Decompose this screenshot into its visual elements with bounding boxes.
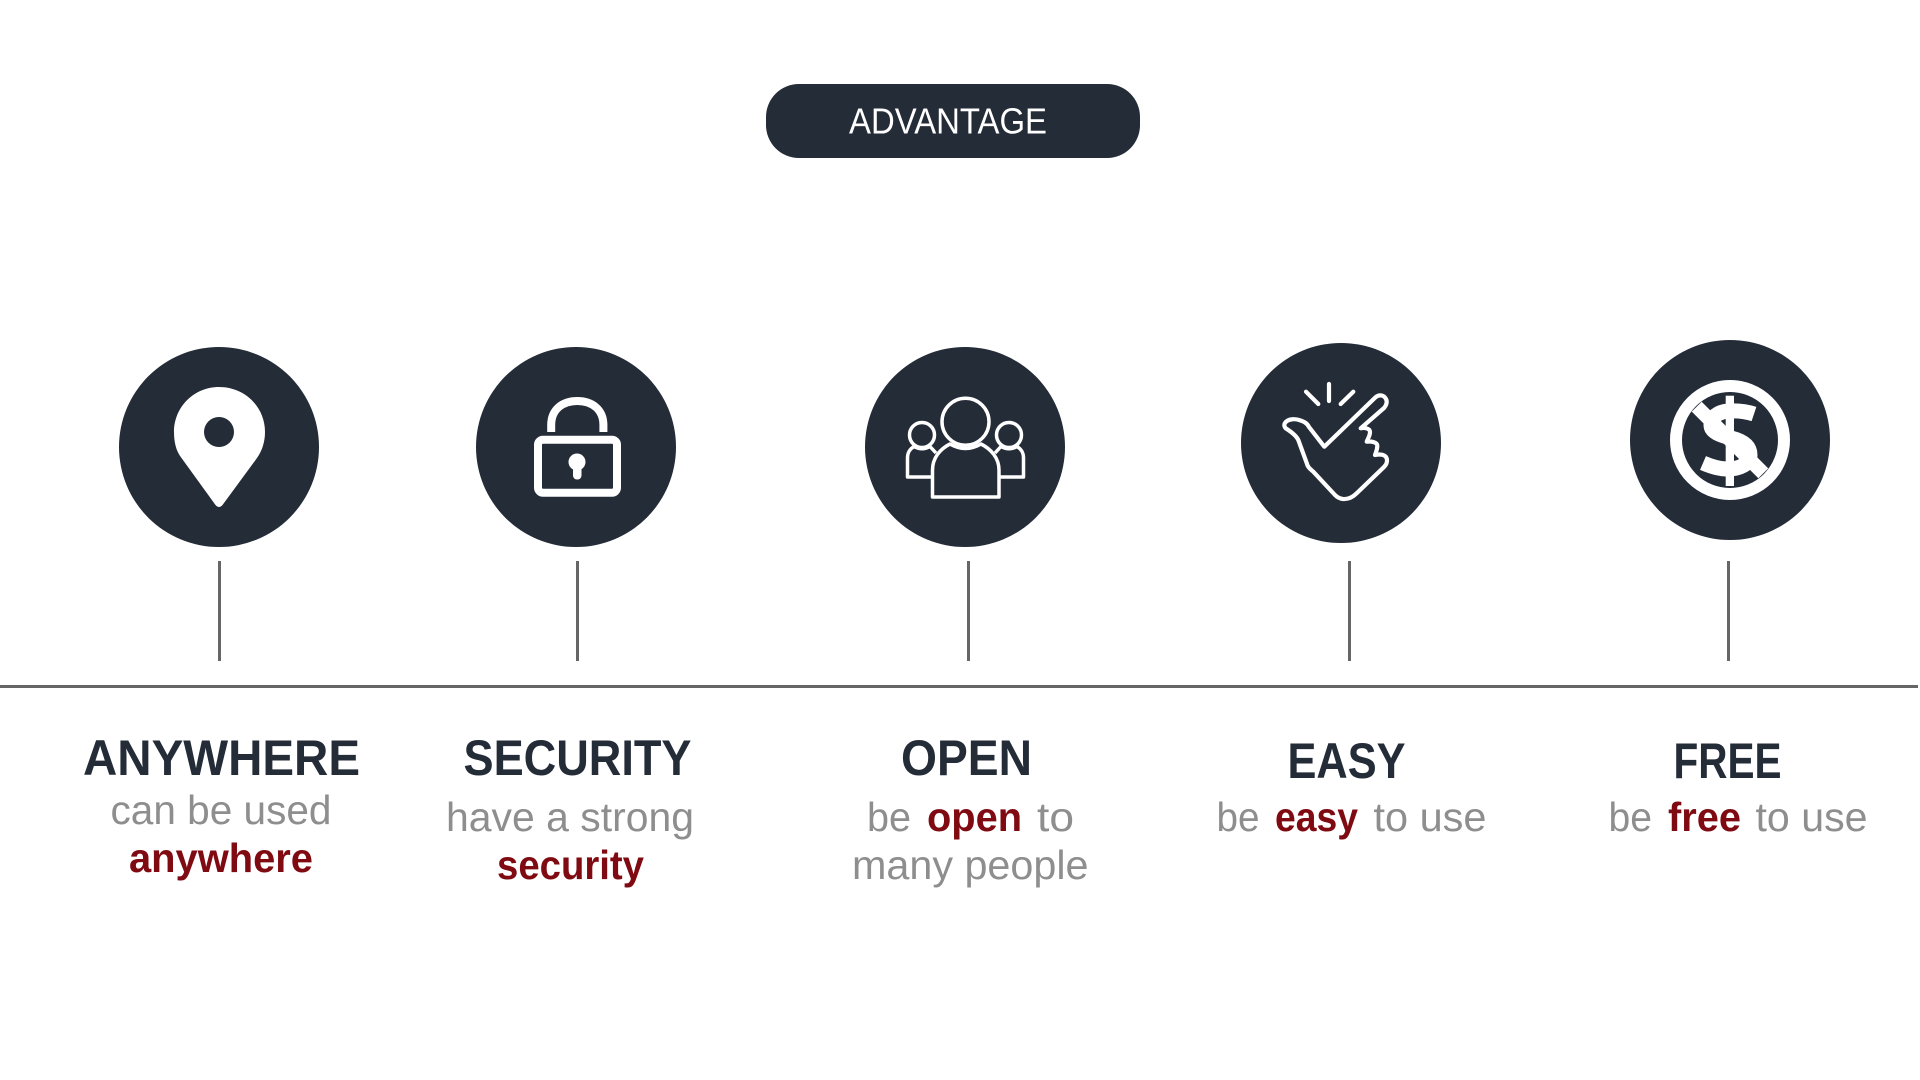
panel: anywhere xyxy=(83,347,360,881)
description: be open to many people: be xyxy=(867,794,911,840)
panel: free xyxy=(1608,340,1868,840)
heading: EASY: EASY xyxy=(1288,733,1406,789)
description: have a strong security xyxy=(446,794,694,888)
description: be open to many people: many people xyxy=(852,842,1088,888)
icon: no dollar sign xyxy=(1630,340,1830,540)
description: have a strong security: security xyxy=(497,842,644,888)
heading: FREE: FREE xyxy=(1674,733,1782,789)
description: be free to use: to use xyxy=(1756,794,1868,840)
description: be easy to use xyxy=(1216,794,1486,840)
heading: OPEN: OPEN xyxy=(901,730,1032,786)
description: can be used anywhere: can be used xyxy=(110,787,332,833)
description: be easy to use: be xyxy=(1216,794,1260,840)
connector line xyxy=(1727,561,1730,661)
description: have a strong security: have a strong xyxy=(446,794,694,840)
description: be easy to use: easy xyxy=(1275,794,1358,840)
icon: finger snap hand xyxy=(1241,343,1441,543)
description: be free to use xyxy=(1608,794,1868,840)
icon: group of people xyxy=(865,347,1065,547)
panel: easy xyxy=(1216,343,1486,840)
connector line xyxy=(576,561,579,661)
connector line xyxy=(218,561,221,661)
connector line xyxy=(1348,561,1351,661)
description: can be used anywhere: anywhere xyxy=(129,835,313,881)
description: be easy to use: to use xyxy=(1374,794,1486,840)
horizontal timeline axis xyxy=(0,685,1918,688)
title badge: ADVANTAGE: ADVANTAGE xyxy=(849,100,1047,142)
icon: location pin xyxy=(119,347,319,547)
connector line xyxy=(967,561,970,661)
heading: ANYWHERE: ANYWHERE xyxy=(83,730,360,786)
panel: security xyxy=(446,347,694,888)
description: be open to many people xyxy=(852,794,1088,888)
title badge: ADVANTAGE xyxy=(766,84,1140,158)
panel: open xyxy=(852,347,1088,888)
description: be open to many people: to xyxy=(1037,794,1074,840)
description: be free to use: be xyxy=(1608,794,1652,840)
heading: SECURITY: SECURITY xyxy=(464,730,692,786)
description: be open to many people: open xyxy=(927,794,1022,840)
description: be free to use: free xyxy=(1668,794,1741,840)
description: can be used anywhere xyxy=(110,787,332,881)
icon: padlock xyxy=(476,347,676,547)
